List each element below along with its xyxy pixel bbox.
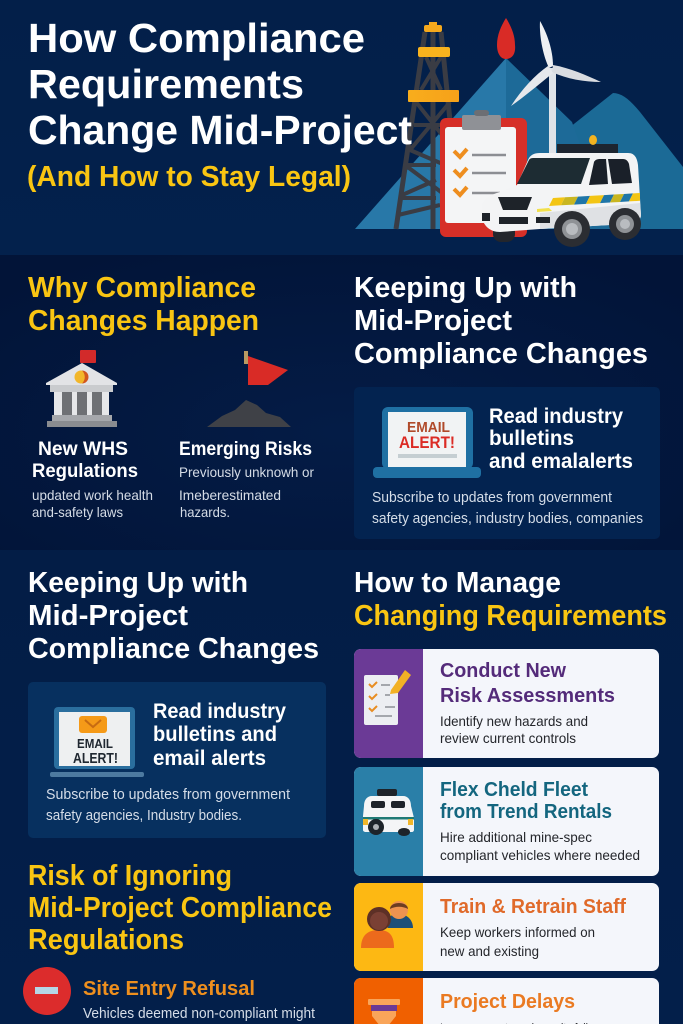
heading: keeping up with changes: Keeping Up with bbox=[354, 272, 577, 304]
text: read industry bulletins and email alerts bbox=[153, 700, 286, 770]
heading: keeping up with changes lower: Mid-Project bbox=[28, 600, 188, 632]
card: project delays bbox=[354, 978, 659, 1024]
illustration: mine site bbox=[355, 18, 683, 247]
text: site entry refusal: Vehicles deemed non-compliant might bbox=[83, 1006, 315, 1022]
heading: how to manage: How to Manage bbox=[354, 567, 561, 599]
text: read industry bulletins: bulletins bbox=[489, 427, 574, 450]
card: train and retrain bbox=[354, 883, 659, 971]
text: read industry bulletins bbox=[489, 405, 633, 473]
heading: keeping up with changes: Compliance Changes bbox=[354, 338, 648, 370]
text: train and retrain staff bbox=[440, 896, 626, 959]
text: read industry bulletins: and emalalerts bbox=[489, 450, 633, 473]
icon: red flame bbox=[497, 18, 515, 59]
heading: how to manage: Changing Requirements bbox=[354, 600, 667, 632]
heading: keeping up with changes lower: Keeping Up with bbox=[28, 567, 248, 599]
text: project delays: Project Delays bbox=[440, 991, 575, 1013]
text: emerging risks: Previously unknowh or bbox=[179, 464, 314, 480]
heading: how to manage bbox=[354, 567, 667, 632]
text: conduct new risk assessments: Conduct New bbox=[440, 660, 566, 682]
subtitle: (And How to Stay Legal) bbox=[27, 161, 351, 193]
text: emerging risks: hazards. bbox=[180, 504, 230, 520]
text: conduct new risk assessments: Risk Assessments bbox=[440, 685, 615, 707]
text: new WHS regulations: Regulations bbox=[32, 461, 138, 482]
text: subscribe to updates bbox=[372, 490, 643, 527]
panel: keeping up upper bbox=[354, 272, 660, 539]
icon: oil derrick bbox=[396, 22, 459, 229]
heading: why compliance changes happen bbox=[28, 272, 259, 337]
title bbox=[28, 15, 412, 153]
text: conduct new risk assessments: Identify new hazards and bbox=[440, 713, 588, 729]
text: site entry refusal: Site Entry Refusal bbox=[83, 978, 255, 1000]
text: new WHS regulations: and-safety laws bbox=[32, 504, 123, 520]
panel: risk of ignoring regulations bbox=[23, 860, 332, 1022]
icon: site vehicle bbox=[482, 135, 641, 247]
heading: keeping up with changes lower: Compliance Changes bbox=[28, 633, 319, 665]
card: email alert bbox=[354, 387, 660, 539]
vehicle hi-vis stripe bbox=[537, 193, 640, 212]
icon: laptop email alert: ALERT! bbox=[399, 433, 455, 452]
icon: no entry sign bbox=[23, 967, 71, 1015]
icon: wind turbine bbox=[511, 21, 601, 156]
text: new WHS regulations: updated work health bbox=[32, 487, 153, 503]
icon: government building bbox=[46, 350, 117, 427]
panel: how to manage changing requirements bbox=[354, 567, 667, 1024]
text: flex cheld fleet: compliant vehicles where needed bbox=[440, 847, 640, 863]
icon: clipboard checklist bbox=[440, 110, 527, 237]
card: conduct risk assessments bbox=[354, 649, 659, 758]
icon: laptop with envelope: EMAIL bbox=[77, 736, 113, 751]
text: train and retrain staff: Keep workers informed on bbox=[440, 924, 595, 940]
icon: checklist and pencil bbox=[364, 670, 411, 725]
panel: hero header bbox=[0, 0, 683, 255]
heading: why compliance changes happen: Changes Happen bbox=[28, 305, 259, 337]
text: subscribe to updates bbox=[46, 787, 290, 824]
icon: laptop with envelope: ALERT! bbox=[73, 750, 118, 767]
text: new WHS regulations bbox=[32, 439, 153, 520]
icon: laptop with envelope bbox=[50, 707, 144, 777]
title: Change Mid-Project bbox=[28, 107, 412, 153]
icon: two workers bbox=[361, 901, 413, 948]
card: email alerts bbox=[28, 682, 326, 838]
text: subscribe to updates: Subscribe to updates from government bbox=[46, 787, 290, 803]
text: read industry bulletins: Read industry bbox=[489, 405, 623, 428]
title: Requirements bbox=[28, 61, 304, 107]
text: read industry bulletins and email alerts: email alerts bbox=[153, 747, 266, 770]
text: site entry refusal bbox=[83, 978, 315, 1022]
text: emerging risks bbox=[179, 439, 314, 520]
panel: why compliance changes happen bbox=[0, 255, 683, 550]
title: How Compliance bbox=[28, 15, 365, 61]
heading: risk of ignoring: Mid-Project Compliance bbox=[28, 892, 332, 924]
text: read industry bulletins and email alerts: bulletins and bbox=[153, 723, 277, 746]
card: flex fleet bbox=[354, 767, 659, 876]
icon: van bbox=[363, 789, 414, 836]
text: train and retrain staff: Train & Retrain Staff bbox=[440, 896, 626, 918]
text: read industry bulletins and email alerts: Read industry bbox=[153, 700, 286, 723]
text: emerging risks: Emerging Risks bbox=[179, 439, 312, 460]
icon: hourglass bbox=[368, 999, 400, 1024]
text: conduct new risk assessments bbox=[440, 660, 615, 746]
icon: laptop email alert bbox=[373, 407, 481, 478]
panel: lower background bbox=[0, 550, 683, 1024]
text: flex cheld fleet bbox=[440, 779, 640, 863]
text: new WHS regulations: New WHS bbox=[38, 439, 128, 460]
text: flex cheld fleet: Flex Cheld Fleet bbox=[440, 779, 588, 801]
text: flex cheld fleet: Hire additional mine-spec bbox=[440, 829, 592, 845]
text: subscribe to updates: safety agencies, industry bodies, companies bbox=[372, 511, 643, 527]
text: flex cheld fleet: from Trend Rentals bbox=[440, 801, 612, 823]
heading: keeping up with changes lower bbox=[28, 567, 319, 665]
text: project delays bbox=[440, 991, 588, 1024]
icon: mountains bbox=[355, 58, 683, 229]
panel: keeping up lower bbox=[28, 567, 326, 838]
text: conduct new risk assessments: review current controls bbox=[440, 730, 576, 746]
heading: why compliance changes happen: Why Compliance bbox=[28, 272, 256, 304]
heading: risk of ignoring: Risk of Ignoring bbox=[28, 860, 232, 892]
heading: risk of ignoring bbox=[28, 860, 332, 956]
text: subscribe to updates: safety agencies, Industry bodies. bbox=[46, 808, 242, 824]
heading: keeping up with changes bbox=[354, 272, 648, 370]
text: emerging risks: Imeberestimated bbox=[179, 487, 281, 503]
icon: laptop email alert: EMAIL bbox=[407, 419, 450, 436]
heading: risk of ignoring: Regulations bbox=[28, 924, 184, 956]
text: train and retrain staff: new and existing bbox=[440, 943, 539, 959]
icon: red flag over rock pile bbox=[207, 351, 291, 427]
heading: keeping up with changes: Mid-Project bbox=[354, 305, 512, 337]
text: subscribe to updates: Subscribe to updates from government bbox=[372, 490, 612, 506]
